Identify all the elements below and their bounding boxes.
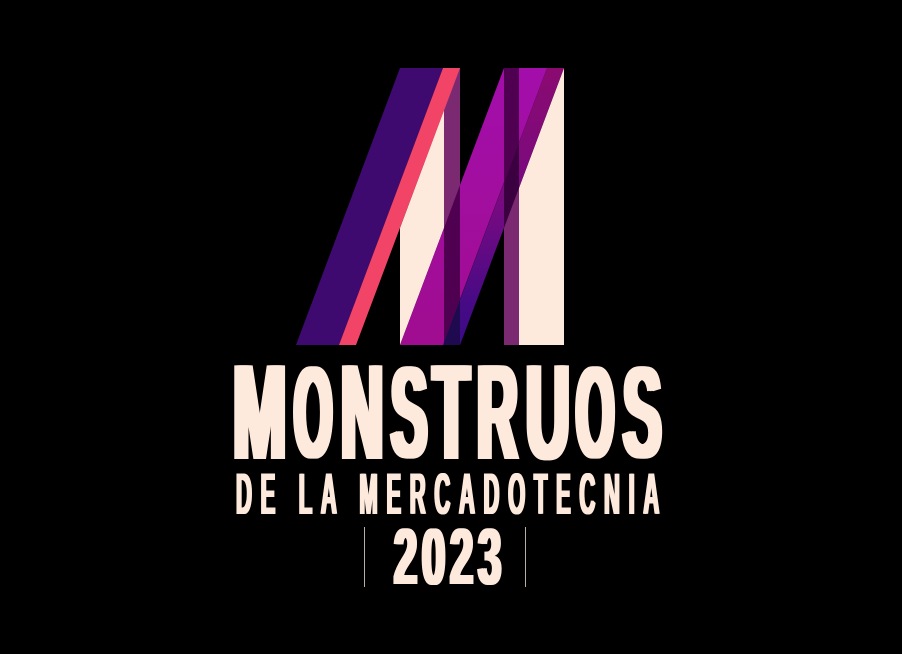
diagonal: coral stroke <box>339 68 460 345</box>
year: 2023: 2023 <box>394 512 506 601</box>
vertical band: left translucent stem <box>444 68 460 345</box>
title: MONSTRUOS <box>233 336 662 488</box>
divider: left of year <box>364 527 365 587</box>
title: MONSTRUOS: N <box>341 336 383 488</box>
title: MONSTRUOS: M <box>233 336 287 488</box>
title: MONSTRUOS: O <box>576 339 614 485</box>
cream panel: left stem <box>400 110 444 345</box>
overlap: left band over magenta <box>444 185 460 342</box>
title: MONSTRUOS: S <box>623 339 661 485</box>
overlap: right band over diagonal <box>504 143 519 228</box>
title: MONSTRUOS: R <box>477 336 518 488</box>
overlap: left band over diagonal <box>444 299 460 345</box>
title: MONSTRUOS: T <box>433 336 469 488</box>
title: MONSTRUOS: S <box>391 339 427 485</box>
overlap: right band over magenta <box>504 68 519 182</box>
diagonal: gradient purple stroke <box>443 68 564 345</box>
subtitle: DE LA MERCADOTECNIA: DE LA MERCADOTECNIA <box>236 462 668 527</box>
cream panel: right stem <box>519 68 564 345</box>
title: MONSTRUOS: O <box>294 339 332 485</box>
diagonal: magenta stroke left part <box>400 185 460 345</box>
vertical band: right translucent stem <box>504 68 519 345</box>
title: MONSTRUOS: U <box>526 336 569 488</box>
diagonal: magenta stroke right part <box>460 68 547 299</box>
divider: right of year <box>525 527 526 587</box>
diagonal: dark purple stroke <box>296 68 443 345</box>
